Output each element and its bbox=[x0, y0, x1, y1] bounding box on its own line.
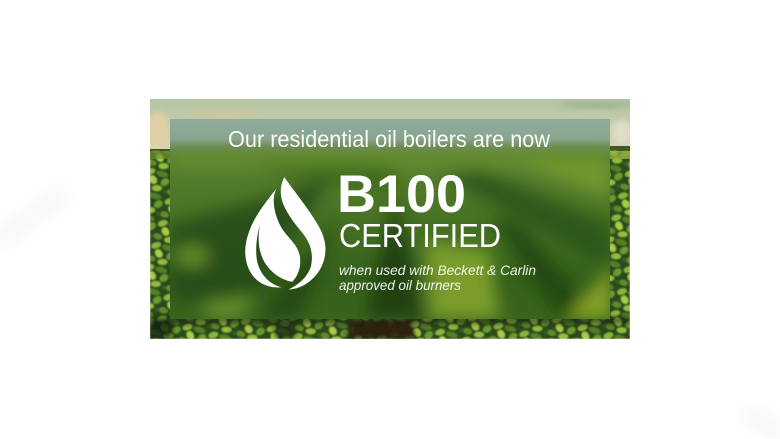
background smudges bbox=[0, 195, 780, 432]
blurred crop rows bbox=[170, 152, 612, 319]
usage note bbox=[339, 262, 536, 293]
CERTIFIED heading: CERTIFIED bbox=[339, 217, 501, 254]
dark soil gaps bbox=[150, 318, 630, 339]
usage note: when used with Beckett & Carlin bbox=[339, 262, 536, 278]
B100 heading: B100 bbox=[337, 165, 466, 224]
clouds bbox=[146, 103, 632, 148]
panel heading: Our residential oil boilers are now bbox=[228, 126, 550, 152]
sky bbox=[150, 99, 630, 151]
crop leaves bbox=[150, 151, 630, 339]
panel: translucent overlay bbox=[170, 119, 612, 319]
tree line bbox=[150, 149, 170, 152]
usage note: approved oil burners bbox=[339, 277, 461, 293]
icon: oil drop with leaf bbox=[245, 177, 325, 290]
photo: soybean field bbox=[146, 99, 632, 339]
